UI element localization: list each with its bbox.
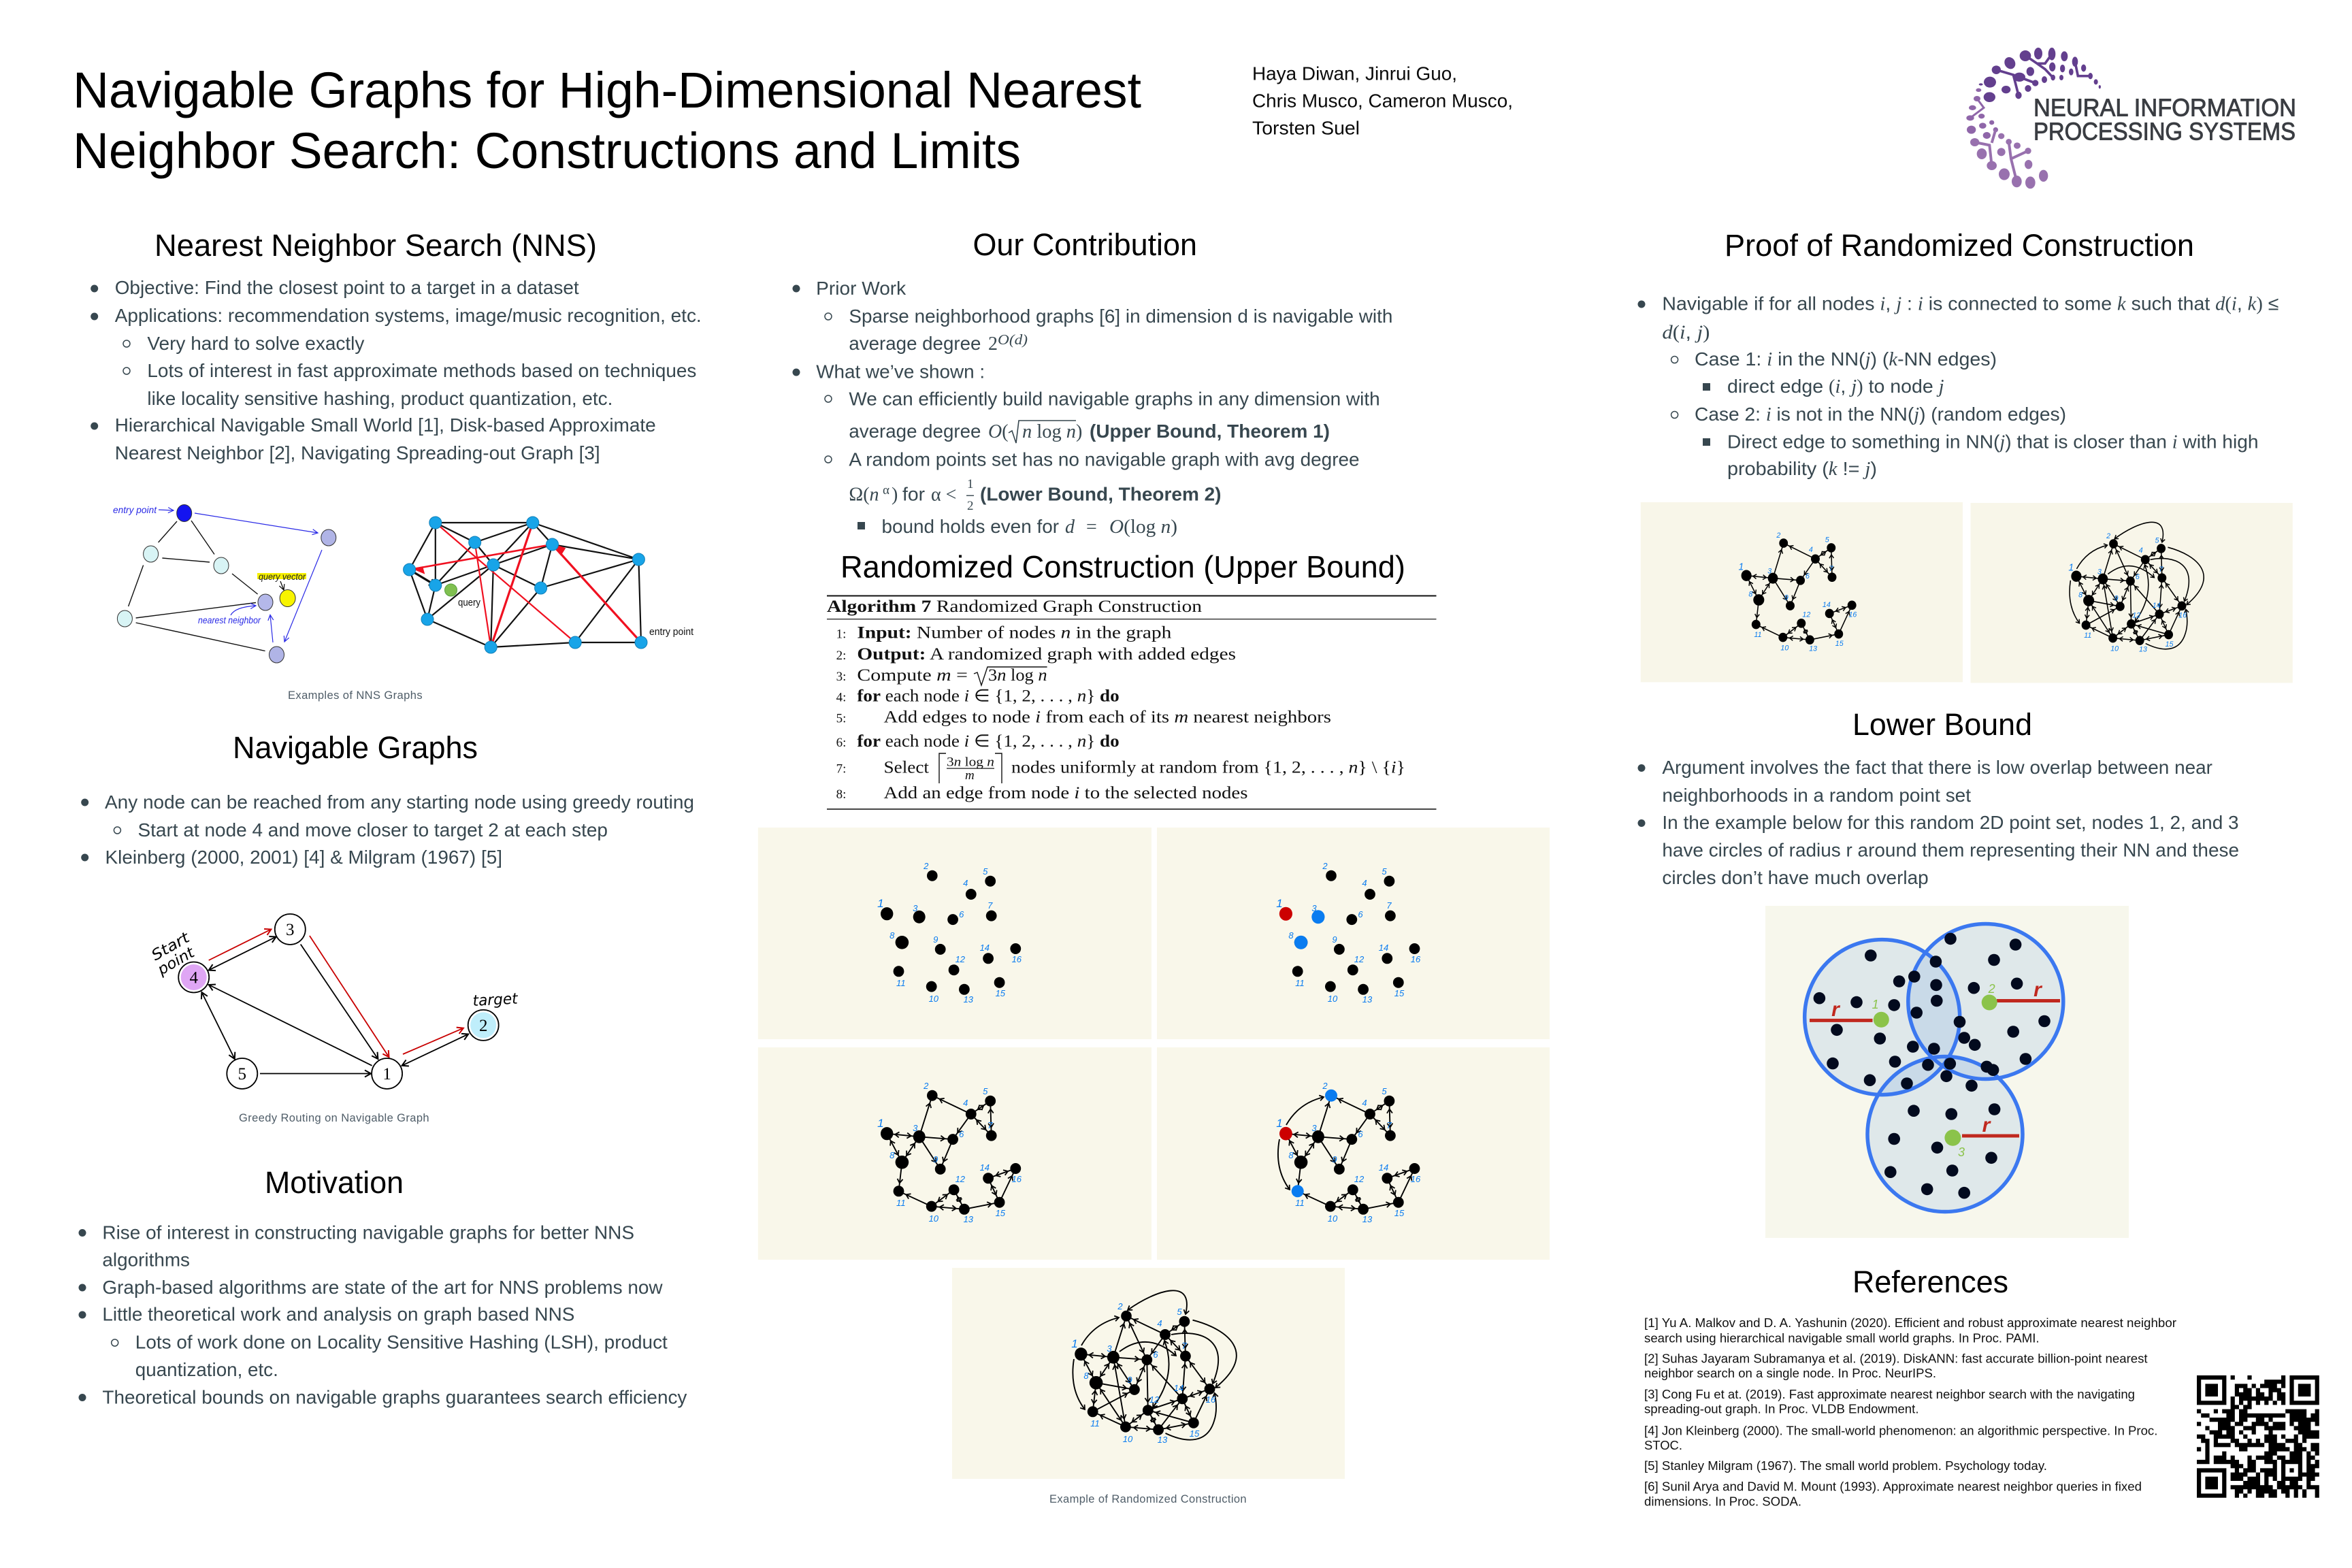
reference list: dimensions. In Proc. SODA. [1644,1494,1801,1509]
bullet list: Lots of interest in fast approximate methods based on techniques [147,360,696,381]
panel: Motivation [79,1165,687,1407]
reference list [1644,1316,2176,1509]
chart: randomized graph, proof: 2 [2106,532,2110,540]
bullet list: quantization, etc. [135,1359,278,1380]
algorithm box: for each node i ∈ {1, 2, . . . , n} do [857,732,1120,751]
panel: Lower Bound [1637,707,2239,1238]
chart: full randomized construction: 13 [1158,1435,1168,1445]
bullet list: 1 [967,477,973,491]
bullet list [1637,757,2239,888]
chart: k-NN graph, proof: 14 [1823,601,1831,609]
chart: randomized graph, proof: 8 [2078,591,2082,600]
chart: greedy routing graph: point [154,944,198,979]
algorithm box: 3n log n [947,755,994,770]
chart: k-NN graph with random edges from node 1: 13 [1362,1214,1373,1224]
chart: full randomized construction: 12 [1149,1394,1160,1405]
bullet list: bound holds even for [882,516,1059,537]
chart: full randomized construction: 7 [1181,1341,1187,1351]
chart: k-NN graph, proof: 8 [1748,590,1752,599]
chart: points only: 15 [996,988,1006,998]
chart: three overlapping neighbourhood circles: r [2034,979,2043,1001]
chart: points with node 1 nearest neighbours: 8 [1288,930,1294,941]
bullet list: Nearest Neighbor [2], Navigating Spreading-out Graph [3] [115,442,600,463]
authors [1252,63,1513,139]
chart: k-NN edges graph: 6 [959,1129,964,1139]
heading: Proof of Randomized Construction [1725,228,2194,263]
chart: k-NN graph with random edges from node 1: 9 [1332,1154,1337,1164]
bullet list: What we’ve shown : [816,361,985,382]
algorithm box: 2: [836,649,846,663]
panel: Nearest Neighbor Search [91,228,702,702]
chart: k-NN graph, proof: 11 [1754,631,1762,639]
chart: points with node 1 nearest neighbours: 3 [1311,903,1317,913]
chart: randomized graph, proof: 12 [2132,611,2140,619]
algorithm box: 4: [836,691,846,705]
reference list: STOC. [1644,1438,1682,1452]
bullet list: A random points set has no navigable graph with avg degree [849,448,1360,470]
bullet list: O(d) [998,331,1028,348]
bullet list: average degree [849,333,981,354]
bullet list: Very hard to solve exactly [147,333,364,354]
chart: three overlapping neighbourhood circles: r [1831,998,1841,1021]
bullet list: Objective: Find the closest point to a target in a dataset [115,277,579,298]
chart: k-NN edges graph: 9 [933,1154,938,1164]
bullet list [1637,293,2278,480]
chart: randomized graph, proof: 14 [2153,602,2161,610]
chart: points only: 1 [877,897,884,910]
chart: k-NN edges graph: 11 [896,1198,906,1208]
algorithm box: 1: [836,627,846,642]
bullet list: algorithms [102,1250,190,1271]
title: Neighbor Search: Constructions and Limits [73,122,1021,179]
chart: greedy routing graph: 3 [286,921,295,939]
panel: Our Contribution [792,227,1392,538]
logo wordmark: PROCESSING SYSTEMS [2034,118,2296,146]
panel: Proof of Randomized Construction [1637,228,2293,683]
bullet list: average degree [849,421,981,442]
bullet list: Kleinberg (2000, 2001) [4] & Milgram (1967) [5] [105,847,502,868]
chart: three overlapping neighbourhood circles: 2 [1988,982,1995,996]
bullet list: Navigable if for all nodes i, j : i is connected to some k such that d(i, k) ≤ [1662,293,2278,314]
bullet list: for [902,483,925,504]
algorithm box: 6: [836,736,846,750]
chart: full randomized construction: 3 [1107,1343,1112,1354]
bullet list: n log n [1022,421,1076,442]
chart: randomized graph, proof: 7 [2159,566,2163,574]
chart: points only: 9 [933,934,938,945]
chart: k-NN edges graph: 7 [987,1120,993,1130]
chart: points with node 1 nearest neighbours: 11 [1295,978,1305,988]
chart: points only: 10 [929,994,939,1004]
algorithm box [827,595,1436,810]
chart: NNS graph example 1: nearest neighbor [198,615,261,625]
chart: k-NN graph with random edges from node 1: 14 [1379,1162,1388,1173]
chart: k-NN edges graph [758,1047,1152,1260]
chart: points with node 1 nearest neighbours: 15 [1394,988,1405,998]
algorithm box: 8: [836,787,846,802]
chart: randomized graph, proof: 15 [2166,640,2174,649]
bullet list: Theoretical bounds on navigable graphs guarantees search efficiency [102,1387,687,1407]
reference list: [6] Sunil Arya and David M. Mount (1993). Approximate nearest neighbor queries in fixed [1644,1480,2142,1494]
algorithm box: 5: [836,712,846,726]
chart: points only: 4 [963,878,968,888]
chart: greedy routing graph: 1 [382,1065,391,1083]
reference list: [1] Yu A. Malkov and D. A. Yashunin (2020). Efficient and robust approximate nearest neighbor [1644,1316,2176,1330]
chart: k-NN graph, proof: 9 [1784,593,1788,602]
chart: greedy routing graph: 4 [189,969,198,987]
chart: randomized graph, proof [1971,503,2293,683]
bullet list: Lots of work done on Locality Sensitive Hashing (LSH), product [135,1332,668,1353]
bullet list [91,277,702,463]
chart: full randomized construction: 10 [1123,1434,1133,1444]
bullet list: Sparse neighborhood graphs [6] in dimension d is navigable with [849,306,1392,327]
algorithm box: Add an edge from node i to the selected nodes [883,784,1248,802]
chart: points with node 1 nearest neighbours: 4 [1362,878,1367,888]
bullet list: d(i, j) [1662,322,1710,344]
bullet list [81,791,694,868]
bullet list: circles don’t have much overlap [1662,867,1929,888]
chart: full randomized construction: 14 [1174,1383,1183,1393]
heading: Lower Bound [1852,707,2032,742]
bullet list [792,278,1392,538]
reference list: [5] Stanley Milgram (1967). The small world problem. Psychology today. [1644,1458,2047,1473]
chart: randomized graph, proof: 11 [2084,632,2091,640]
bullet list: Graph-based algorithms are state of the art for NNS problems now [102,1277,663,1298]
chart: points only: 3 [913,903,918,913]
chart: k-NN edges graph: 16 [1012,1174,1022,1184]
chart: points only: 2 [923,861,929,871]
chart: k-NN graph with random edges from node 1: 15 [1394,1208,1405,1218]
bullet list: d [1065,517,1075,538]
bullet list: like locality sensitive hashing, product quantization, etc. [147,388,612,409]
algorithm box: Select [883,759,929,777]
chart: full randomized construction: 2 [1117,1301,1123,1311]
chart: k-NN graph with random edges from node 1: 2 [1322,1081,1328,1091]
chart: k-NN edges graph: 1 [877,1117,884,1130]
chart: points with node 1 nearest neighbours: 9 [1332,934,1337,945]
bullet list: Case 2: i is not in the NN(j) (random edges) [1695,404,2066,425]
bullet list: ) [892,484,898,505]
bullet list: Prior Work [816,278,906,299]
chart: k-NN graph with random edges from node 1: 7 [1386,1120,1392,1130]
chart: points with node 1 nearest neighbours: 5 [1382,866,1387,877]
chart: k-NN graph, proof: 4 [1809,546,1813,554]
panel: Navigable Graphs [81,730,694,1124]
chart: k-NN graph with random edges from node 1 [1157,1047,1550,1260]
algorithm box: Algorithm 7 Randomized Graph Construction [827,598,1203,616]
chart: k-NN edges graph: 12 [956,1174,966,1184]
chart: points only: 7 [987,900,993,911]
algorithm box: 3: [836,670,846,684]
icon: logo blobs [1966,48,2101,189]
chart: k-NN graph, proof: 13 [1809,644,1817,653]
authors: Haya Diwan, Jinrui Guo, [1252,63,1457,84]
algorithm box: Input: Number of nodes n in the graph [857,624,1172,642]
chart: full randomized construction: 8 [1083,1371,1089,1381]
chart: randomized graph, proof: 4 [2139,546,2143,555]
reference list: neighbor search on a single node. In Proc. NeurIPS. [1644,1366,1936,1380]
chart: NNS graph example 2: query [458,598,481,608]
chart: k-NN graph, proof: 2 [1776,532,1780,540]
chart: full randomized construction: 5 [1177,1307,1182,1317]
logo wordmark [2034,94,2296,146]
reference list: [4] Jon Kleinberg (2000). The small-world phenomenon: an algorithmic perspective. In Proc. [1644,1423,2157,1437]
chart: k-NN graph, proof: 10 [1780,644,1788,653]
chart: k-NN edges graph: 13 [964,1214,974,1224]
chart: full randomized construction: 4 [1157,1318,1162,1328]
chart: k-NN edges graph: 2 [923,1081,929,1091]
bullet list: 2 [967,499,973,513]
chart: three overlapping neighbourhood circles: 1 [1872,998,1879,1011]
algorithm box: 3n log n [988,666,1047,685]
chart: points with node 1 nearest neighbours: 10 [1328,994,1338,1004]
chart: NNS graph example 1 [113,504,336,663]
heading: Randomized Construction (Upper Bound) [840,550,1405,585]
bullet list: In the example below for this random 2D point set, nodes 1, 2, and 3 [1662,812,2239,833]
chart: NNS graph example 2 [404,517,693,653]
chart: greedy routing graph: 5 [238,1065,246,1083]
icon: QR code [2197,1377,2319,1496]
chart: greedy routing graph: Start [148,929,193,964]
chart: k-NN graph, proof: 15 [1835,640,1844,648]
chart: points with node 1 nearest neighbours: 12 [1354,954,1365,964]
chart: k-NN graph with random edges from node 1: 5 [1382,1086,1387,1096]
chart: three overlapping neighbourhood circles: r [1982,1114,1992,1137]
reference list: [2] Suhas Jayaram Subramanya et al. (2019). DiskANN: fast accurate billion-point nearest [1644,1352,2148,1366]
chart: k-NN edges graph: 5 [983,1086,988,1096]
chart: greedy routing graph: target [472,991,519,1010]
chart: randomized graph, proof: 6 [2136,573,2140,581]
caption: Greedy Routing on Navigable Graph [239,1112,429,1124]
chart: full randomized construction: 6 [1153,1350,1158,1360]
chart: full randomized construction: 11 [1090,1418,1100,1428]
chart: full randomized construction [952,1268,1345,1479]
chart: points only: 5 [983,866,988,877]
chart: three overlapping neighbourhood circles: 3 [1958,1145,1965,1159]
bullet list: Rise of interest in constructing navigable graphs for better NNS [102,1222,634,1243]
chart: full randomized construction: 9 [1127,1375,1132,1385]
chart: k-NN graph, proof [1641,502,1963,682]
algorithm box: for each node i ∈ {1, 2, . . . , n} do [857,687,1120,706]
chart: k-NN graph with random edges from node 1: 6 [1358,1129,1363,1139]
caption: Examples of NNS Graphs [288,689,423,702]
bullet list: We can efficiently build navigable graphs in any dimension with [849,388,1380,409]
chart: randomized graph, proof: 5 [2155,536,2159,545]
chart: greedy routing graph [148,914,519,1089]
bullet list: probability (k != j) [1727,458,1877,480]
bullet list: 2 [988,333,998,355]
chart: points only: 6 [959,909,964,919]
chart: k-NN graph with random edges from node 1: 11 [1295,1198,1305,1208]
chart: points only: 16 [1012,954,1022,964]
chart: k-NN edges graph: 14 [980,1162,990,1173]
bullet list: Any node can be reached from any starting node using greedy routing [105,791,694,813]
chart: k-NN graph with random edges from node 1: 16 [1411,1174,1421,1184]
chart: points with node 1 nearest neighbours [1157,828,1550,1039]
bullet list: α [883,483,889,497]
chart: k-NN graph, proof: 5 [1825,536,1830,544]
chart: randomized graph, proof: 3 [2097,568,2102,576]
bullet list: = [1086,517,1097,538]
chart: NNS graph example 1: entry point [113,504,157,515]
algorithm box: Add edges to node i from each of its m nearest neighbors [883,708,1331,727]
logo: NeurIPS [1966,48,2296,189]
heading: Our Contribution [973,227,1197,262]
authors: Torsten Suel [1252,117,1360,139]
chart: points only: 8 [889,930,895,941]
chart: k-NN graph with random edges from node 1: 4 [1362,1098,1367,1108]
title [73,62,1141,179]
bullet list: Hierarchical Navigable Small World [1], Disk-based Approximate [115,414,656,436]
chart: k-NN edges graph: 10 [929,1213,939,1224]
chart: full randomized construction: 1 [1071,1337,1078,1350]
chart: k-NN graph, proof: 12 [1802,610,1810,619]
bullet list: Ω(n [849,484,879,505]
heading: Motivation [265,1165,404,1200]
panel: Randomized Construction [758,550,1550,1505]
chart: randomized graph, proof: 13 [2139,645,2147,654]
chart: points with node 1 nearest neighbours: 16 [1411,954,1421,964]
bullet list: neighborhoods in a random point set [1662,785,1971,806]
chart: k-NN graph with random edges from node 1: 3 [1311,1123,1317,1133]
chart: randomized graph, proof: 16 [2178,611,2187,619]
bullet list: Argument involves the fact that there is low overlap between near [1662,757,2212,778]
chart: full randomized construction: 15 [1190,1428,1200,1439]
chart: k-NN graph, proof: 1 [1739,561,1744,573]
chart: three overlapping neighbourhood circles [1765,906,2129,1238]
authors: Chris Musco, Cameron Musco, [1252,90,1513,112]
bullet list: O(log n) [1109,517,1177,538]
chart: k-NN graph, proof: 7 [1829,565,1833,573]
title: Navigable Graphs for High-Dimensional Nearest [73,62,1141,118]
chart: full randomized construction: 16 [1206,1394,1216,1405]
chart: points with node 1 nearest neighbours: 14 [1379,943,1388,953]
chart: points only [758,828,1152,1039]
chart: NNS graph example 1: query vector [259,571,306,582]
chart: k-NN graph with random edges from node 1: 8 [1288,1150,1294,1160]
algorithm box: 7: [836,762,846,777]
bullet list: (Lower Bound, Theorem 2) [980,483,1221,504]
caption: Example of Randomized Construction [1049,1493,1247,1505]
chart: randomized graph, proof: 9 [2114,594,2119,603]
bullet list: direct edge (i, j) to node j [1727,376,1944,397]
chart: NNS graph example 2: entry point [649,627,693,638]
bullet list: Direct edge to something in NN(j) that is closer than i with high [1727,431,2258,453]
chart: points only: 12 [956,954,966,964]
chart: k-NN edges graph: 3 [913,1123,918,1133]
bullet list: Applications: recommendation systems, image/music recognition, etc. [115,305,702,326]
bullet list: (Upper Bound, Theorem 1) [1090,421,1330,442]
chart: k-NN graph with random edges from node 1: 10 [1328,1213,1338,1224]
chart: k-NN edges graph: 8 [889,1150,895,1160]
chart: k-NN edges graph: 4 [963,1098,968,1108]
chart: points with node 1 nearest neighbours: 2 [1322,861,1328,871]
bullet list: ) [1076,421,1082,442]
heading: Navigable Graphs [233,730,478,765]
bullet list: have circles of radius r around them representing their NN and these [1662,839,2239,860]
chart: greedy routing graph: 2 [479,1017,487,1035]
chart: points only: 14 [980,943,990,953]
heading: References [1852,1264,2008,1299]
algorithm box: nodes uniformly at random from {1, 2, . . . , n} \ {i} [1011,759,1405,777]
reference list: spreading-out graph. In Proc. VLDB Endowment. [1644,1402,1919,1416]
algorithm box: Output: A randomized graph with added edges [857,645,1236,664]
chart: k-NN edges graph: 15 [996,1208,1006,1218]
chart: points only: 11 [896,978,906,988]
algorithm box: m [965,768,975,783]
chart: k-NN graph with random edges from node 1: 12 [1354,1174,1365,1184]
chart: points only: 13 [964,994,974,1004]
bullet list: α < [931,484,956,505]
chart: randomized graph, proof: 1 [2068,562,2074,574]
chart: points with node 1 nearest neighbours: 13 [1362,994,1373,1004]
chart: k-NN graph with random edges from node 1: 1 [1276,1117,1283,1130]
chart: points with node 1 nearest neighbours: 6 [1358,909,1363,919]
chart: points with node 1 nearest neighbours: 1 [1276,897,1283,910]
bullet list: Start at node 4 and move closer to target 2 at each step [137,819,608,840]
chart: randomized graph, proof: 10 [2110,644,2119,653]
chart: points with node 1 nearest neighbours: 7 [1386,900,1392,911]
reference list: search using hierarchical navigable small world graphs. In Proc. PAMI. [1644,1331,2040,1345]
chart: k-NN graph, proof: 16 [1848,610,1857,619]
reference list: [3] Cong Fu et at. (2019). Fast approximate nearest neighbor search with the navigating [1644,1387,2135,1401]
chart: k-NN graph, proof: 3 [1767,567,1771,576]
bullet list: O( [988,421,1009,442]
chart: k-NN graph, proof: 6 [1806,572,1810,581]
bullet list [79,1222,687,1407]
bullet list: Case 1: i in the NN(j) (k-NN edges) [1695,348,1997,370]
panel: References [1644,1264,2319,1509]
bullet list: Little theoretical work and analysis on graph based NNS [102,1304,574,1325]
heading: Nearest Neighbor Search (NNS) [154,228,597,263]
logo wordmark: NEURAL INFORMATION [2034,94,2296,121]
algorithm box: Compute m = [857,666,968,685]
